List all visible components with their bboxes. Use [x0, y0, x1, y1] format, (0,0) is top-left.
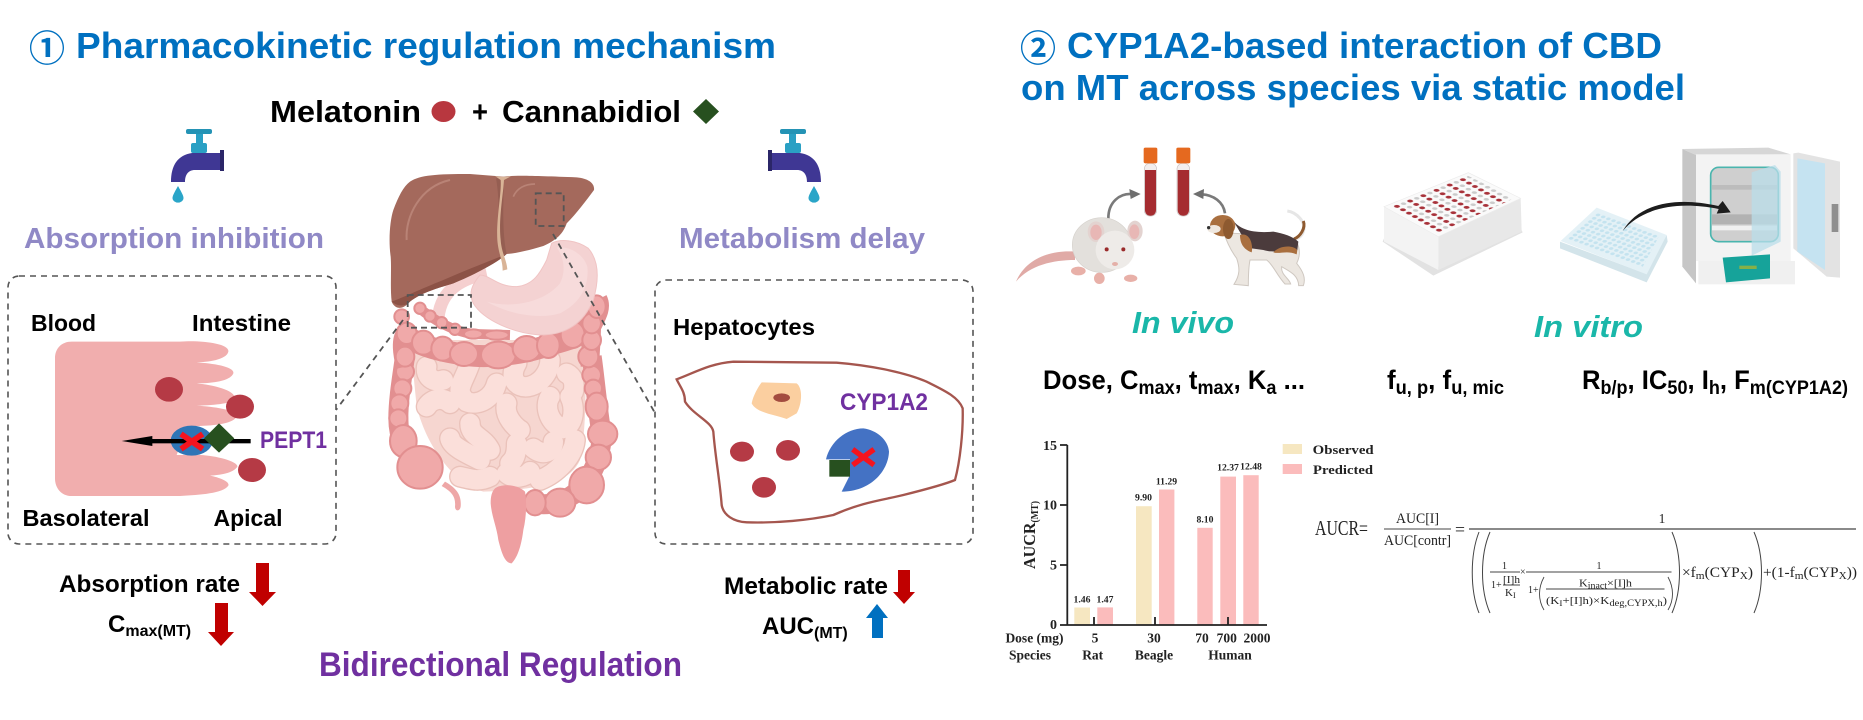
icon: sample block: [1383, 173, 1523, 276]
icon: left faucet: [171, 129, 224, 203]
x-axis labels: 70: [1195, 631, 1209, 646]
value labels: 9.90: [1135, 493, 1152, 504]
value labels: [1074, 461, 1262, 605]
formula: AUCR equation: (K: [1546, 595, 1558, 607]
formula: AUCR equation: I: [1559, 599, 1563, 608]
formula: AUCR equation: 1: [1659, 511, 1665, 526]
colon and intestine, lower part: [389, 340, 617, 563]
formula: AUCR equation: [I]h: [1503, 575, 1520, 586]
callout: liver zoom box and leader line: [536, 193, 655, 413]
value labels: 12.48: [1240, 461, 1262, 472]
formula: AUCR equation: ×: [1520, 567, 1526, 578]
heading: metabolism delay: Metabolism delay: [679, 223, 925, 255]
title: section 2 heading: on MT across species via static model: [1021, 67, 1685, 108]
icon: blood tubes: [1144, 148, 1190, 216]
text: in vitro parameters: 50: [1667, 378, 1687, 399]
label: apical: Apical: [214, 505, 282, 531]
chart: AUCR bar chart: [1005, 439, 1375, 662]
formula: AUCR equation: 1+: [1491, 580, 1502, 591]
formula: AUCR equation: AUCR=: [1315, 516, 1368, 540]
legend: [1283, 442, 1375, 477]
label: in vitro: In vitro: [1534, 309, 1643, 344]
value labels: 11.29: [1156, 476, 1177, 487]
text: in vivo parameters: ...: [1276, 365, 1305, 395]
formula: AUCR equation: )): [1847, 565, 1857, 581]
text: absorption rate with down arrow: Absorption rate: [59, 571, 240, 598]
arrow: beagle to tube: [1193, 189, 1225, 213]
x-axis labels: Species: [1009, 647, 1051, 662]
value labels: 1.46: [1074, 594, 1091, 605]
formula: AUCR equation: =: [1455, 520, 1465, 539]
illustration: sample block, cell plate and incubator: [1383, 148, 1840, 284]
formula: AUCR equation: I: [1513, 591, 1516, 600]
y-axis tick labels: [1043, 439, 1057, 633]
value labels: 8.10: [1197, 515, 1214, 526]
y-axis tick labels: 15: [1043, 439, 1057, 454]
formula: AUCR equation: K: [1579, 578, 1587, 590]
formula: AUCR equation: ×f: [1682, 565, 1695, 581]
legend: Predicted: [1313, 462, 1374, 477]
text: in vitro parameters: , I: [1687, 365, 1709, 395]
y-axis tick labels: 5: [1050, 558, 1057, 574]
title: section 1 heading: Pharmacokinetic regulation mechanism: [76, 25, 776, 66]
title: section 2 heading: [1020, 20, 1685, 108]
stomach, liver, upper colon: [390, 174, 606, 368]
illustration: rat and beagle blood sampling: [1016, 148, 1304, 286]
formula: AUCR equation: 1+: [1528, 585, 1539, 596]
text: in vivo parameters: max: [1197, 378, 1234, 399]
bars: observed and predicted: [1074, 475, 1259, 625]
arrow: plate to incubator: [1623, 201, 1731, 231]
text: Cmax(MT) with down arrow: [108, 603, 234, 646]
formula: AUCR equation: K: [1505, 587, 1513, 599]
formula: AUCR equation: [1315, 511, 1857, 613]
x-axis labels: 30: [1147, 631, 1161, 646]
text: in vivo parameters: Dose, C: [1043, 365, 1144, 395]
text: unbound fraction parameters: , f: [1428, 365, 1452, 395]
formula: AUCR equation: ): [1663, 595, 1667, 607]
x-axis labels: Beagle: [1135, 647, 1173, 662]
formula: AUCR equation: inact: [1588, 581, 1608, 591]
y-axis title: (MT): [1030, 501, 1041, 523]
formula: AUCR equation: X: [1740, 570, 1748, 582]
text: metabolic rate with down arrow: [724, 570, 915, 604]
label: PEPT1: PEPT1: [260, 427, 327, 454]
text: in vitro parameters: m(CYP1A2): [1750, 378, 1848, 399]
label: blood: Blood: [31, 310, 96, 336]
text: in vitro parameters: R: [1582, 365, 1602, 395]
y-axis tick labels: 10: [1043, 498, 1057, 514]
title: section 1 heading: ①: [29, 20, 65, 72]
formula: AUCR equation: m: [1795, 570, 1804, 582]
label: hepatocytes: Hepatocytes: [673, 314, 815, 340]
formula: AUCR equation: +[I]h)×K: [1563, 595, 1610, 607]
panel: intestine absorption: [8, 276, 336, 544]
formula: AUCR equation: deg,CYPX,h: [1609, 598, 1663, 608]
text: in vivo parameters: , K: [1234, 365, 1267, 395]
x-axis labels: 5: [1092, 631, 1099, 646]
icon: beagle: [1207, 211, 1304, 286]
x-axis labels: Dose (mg): [1005, 631, 1064, 646]
enterocyte cell: [55, 341, 266, 496]
x-axis labels: [1005, 631, 1271, 662]
x-axis labels: 2000: [1244, 631, 1271, 646]
legend: Observed: [1313, 442, 1375, 457]
callout: intestine zoom box and leader line: [336, 295, 471, 410]
illustration: liver and digestive tract: [389, 174, 617, 563]
legend: melatonin plus cannabidiol: Cannabidiol: [502, 94, 681, 129]
y-axis tick labels: 0: [1050, 618, 1057, 633]
text: in vitro parameters: b/p: [1601, 378, 1628, 399]
text: unbound fraction parameters: u, mic: [1451, 378, 1504, 399]
text: AUC(MT) with up arrow: (MT): [814, 625, 848, 642]
text: unbound fraction parameters: f: [1387, 365, 1396, 395]
text: in vitro parameters: h: [1709, 378, 1720, 399]
hepatocyte cell: [677, 362, 963, 523]
label: CYP1A2: CYP1A2: [840, 389, 928, 416]
text: in vitro parameters: , IC: [1628, 365, 1667, 395]
heading: absorption inhibition: Absorption inhibition: [24, 223, 324, 255]
label: in vivo: In vivo: [1132, 305, 1234, 340]
x-axis labels: Rat: [1082, 647, 1104, 662]
text: in vivo parameters: max: [1139, 378, 1175, 399]
title: section 2 heading: ②: [1020, 20, 1056, 72]
text: Cmax(MT) with down arrow: C: [108, 611, 125, 638]
formula: AUCR equation: 1: [1596, 561, 1602, 572]
value labels: 12.37: [1217, 463, 1239, 474]
formula: AUCR equation: (CYP: [1705, 565, 1740, 581]
value labels: 1.47: [1097, 594, 1114, 605]
title: section 2 heading: CYP1A2-based interaction of CBD: [1067, 25, 1662, 66]
x-axis labels: Human: [1208, 647, 1252, 662]
label: intestine: Intestine: [192, 310, 291, 336]
text: in vivo parameters: a: [1266, 378, 1277, 399]
formula: AUCR equation: +(1-f: [1763, 565, 1794, 581]
arrow: rat to tube: [1108, 189, 1141, 218]
icon: rat: [1016, 218, 1143, 284]
legend: melatonin plus cannabidiol: +: [472, 96, 488, 129]
x-axis labels: 700: [1217, 631, 1237, 646]
text: absorption rate with down arrow: [59, 563, 276, 606]
legend: melatonin plus cannabidiol: Melatonin: [270, 94, 421, 129]
formula: AUCR equation: ): [1748, 565, 1753, 581]
formula: AUCR equation: X: [1839, 570, 1847, 582]
legend: melatonin plus cannabidiol: [270, 94, 719, 129]
icon: right faucet: [768, 129, 821, 203]
formula: AUCR equation: (CYP: [1804, 565, 1839, 581]
panel: hepatocytes metabolism: [655, 280, 973, 544]
formula: AUCR equation: ×[I]h: [1607, 578, 1633, 590]
text: unbound fraction parameters: u, p: [1396, 378, 1428, 399]
label: basolateral: Basolateral: [22, 505, 150, 531]
formula: AUCR equation: m: [1696, 570, 1705, 582]
text: AUC(MT) with up arrow: AUC: [762, 613, 814, 640]
formula: AUCR equation: 1: [1502, 561, 1507, 572]
formula: AUCR equation: AUC[contr]: [1384, 533, 1451, 549]
text: in vitro parameters: , F: [1720, 365, 1750, 395]
formula: AUCR equation: AUC[I]: [1396, 511, 1439, 527]
text: metabolic rate with down arrow: Metabolic rate: [724, 573, 888, 600]
text: Cmax(MT) with down arrow: max(MT): [125, 623, 191, 640]
text: in vivo parameters: , t: [1175, 365, 1197, 395]
heading: bidirectional regulation: Bidirectional Regulation: [319, 646, 682, 684]
icon: incubator: [1682, 148, 1840, 284]
y-axis title: AUCR: [1020, 520, 1039, 569]
axes: [1060, 445, 1267, 625]
text: AUC(MT) with up arrow: [762, 604, 888, 642]
icon: cell culture plate: [1560, 208, 1668, 282]
